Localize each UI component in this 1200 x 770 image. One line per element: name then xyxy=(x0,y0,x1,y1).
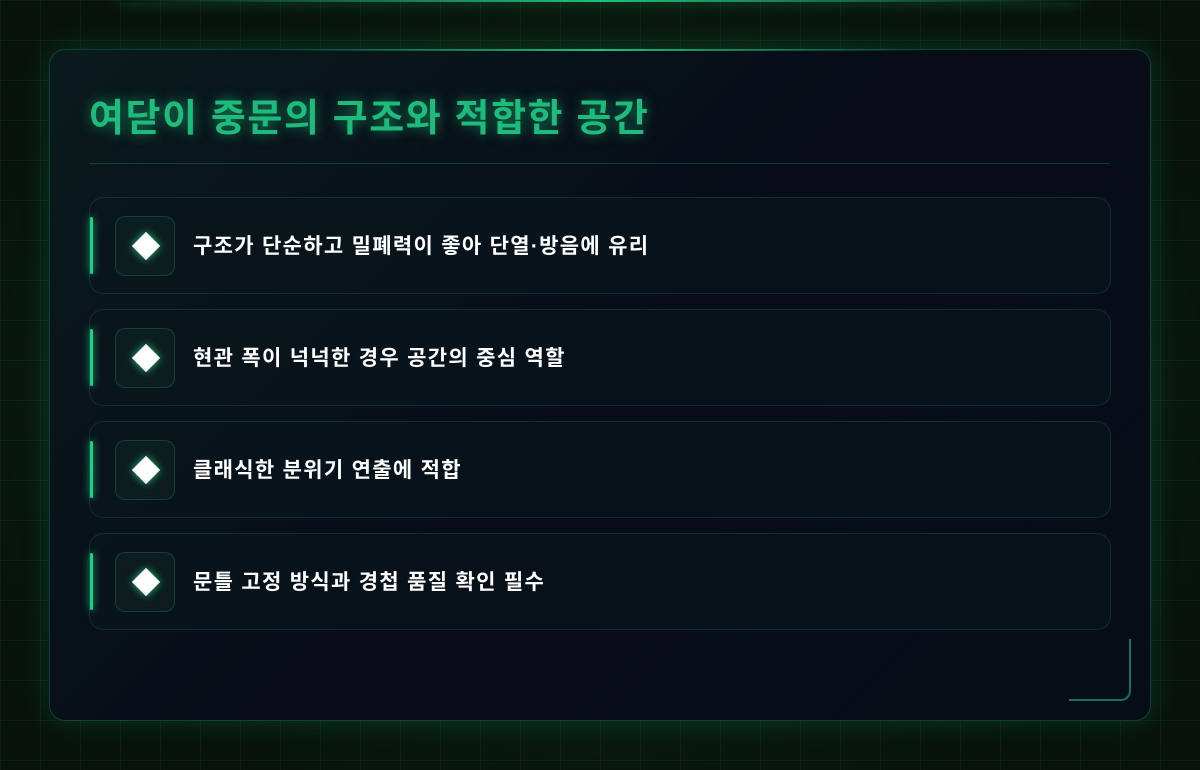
title: 여닫이 중문의 구조와 적합한 공간 xyxy=(89,98,649,140)
item 2 xyxy=(89,309,1111,406)
text: 현관 폭이 넉넉한 경우 공간의 중심 역할 xyxy=(193,347,566,370)
item 1 xyxy=(89,197,1111,294)
icon: diamond xyxy=(115,328,175,388)
corner bracket xyxy=(1069,639,1131,701)
text: 구조가 단순하고 밀폐력이 좋아 단열·방음에 유리 xyxy=(193,235,649,258)
icon: diamond xyxy=(115,216,175,276)
text: 클래식한 분위기 연출에 적합 xyxy=(193,459,462,482)
item 4 xyxy=(89,533,1111,630)
item 3 xyxy=(89,421,1111,518)
icon: diamond xyxy=(115,440,175,500)
text: 문틀 고정 방식과 경첩 품질 확인 필수 xyxy=(193,571,545,594)
icon: diamond xyxy=(115,552,175,612)
